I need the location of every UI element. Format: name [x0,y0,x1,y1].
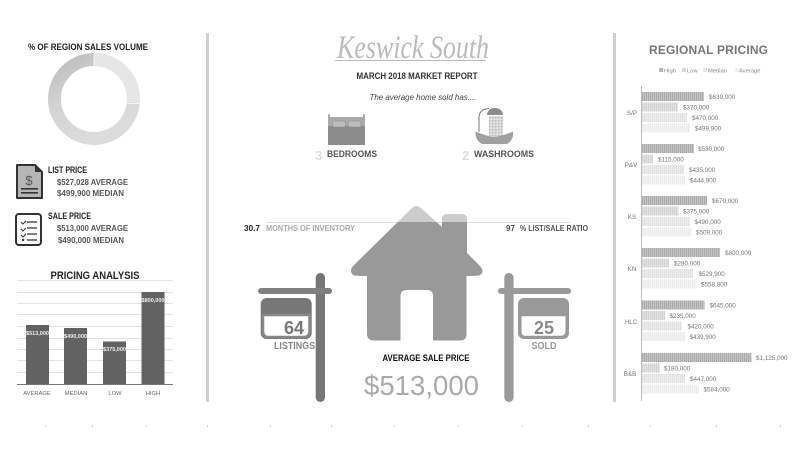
sign: listings [258,273,332,402]
group: HLC: HLC [625,319,638,326]
group: HLC [625,300,736,341]
text: washrooms [462,148,534,163]
group: B&B [624,353,788,394]
stat: list/sale ratio: 97 [506,223,515,233]
text: bedrooms: BEDROOMS [327,149,377,160]
sign: listings: LISTINGS [274,340,315,352]
bar: median: $490,000 [64,334,87,340]
group: B&B: $447,000 [690,376,717,383]
group: P&V: $115,000 [658,156,684,164]
group: P&V: $444,900 [690,178,717,184]
group: KN: $280,000 [674,260,701,268]
text: average sale price label: AVERAGE SALE PRICE [382,353,470,363]
heading: pricing analysis: PRICING ANALYSIS [50,270,140,282]
bar: low [103,342,126,384]
group: KS: KS [628,214,636,221]
text: washrooms: WASHROOMS [474,149,534,160]
donut chart: region sales volume [54,54,140,138]
text: bedrooms: 3 [315,148,322,163]
group: KN: KN [628,266,637,273]
group: KS: $490,000 [694,219,721,226]
group: HLC: $420,000 [688,324,714,330]
icon: shower and tub [475,108,513,144]
group: P&V [625,144,725,184]
group: S/P: $499,900 [695,126,722,132]
group: S/P: $370,000 [683,104,710,112]
group: KN: $529,900 [698,271,725,278]
group: B&B: $584,000 [704,386,730,394]
group: HLC: $235,000 [670,313,696,320]
bar chart: pricing analysis [17,280,173,397]
title: Keswick South: Keswick South [336,30,489,66]
axis labels: LOW [108,391,122,397]
bar: average: $513,000 [26,331,49,337]
panel: sale price [16,211,128,245]
stat: months of inventory: 30.7 [244,223,260,233]
sign: sold [498,273,571,402]
stat: months of inventory: MONTHS OF INVENTORY [266,223,355,233]
group: S/P: S/P [627,110,637,117]
group: P&V: $435,000 [689,167,716,174]
group: P&V: $530,000 [698,146,725,153]
icon: house [351,206,482,340]
group: S/P: $470,000 [692,115,719,122]
text: washrooms: 2 [462,148,469,163]
group: HLC: $439,900 [690,334,716,341]
group: S/P [627,92,736,132]
group: KS: $509,000 [696,230,723,236]
group: S/P: $639,000 [709,94,736,101]
subtitle: market report: MARCH 2018 MARKET REPORT [356,71,478,81]
group: P&V: P&V [625,162,638,169]
group: B&B: B&B [624,371,636,378]
legend: Median [708,68,727,74]
group: B&B: $1,125,000 [756,355,788,362]
text: the average home sold has: The average home sold has.... [370,93,476,102]
sign: listings: 64 [284,318,304,338]
axis labels: AVERAGE [23,391,51,397]
legend: Low [687,68,698,74]
bar: low: $375,000 [103,347,126,353]
group: KN: $800,000 [725,250,752,257]
bar: high: $800,000 [142,298,164,304]
sign: sold: 25 [534,318,554,338]
text: sale price median: $490,000 MEDIAN [58,235,124,245]
group: HLC: $645,000 [710,302,736,310]
text: sale price average: $513,000 AVERAGE [57,223,128,233]
axis labels: MEDIAN [65,391,87,397]
bar: average [26,325,49,384]
text: sale price heading: SALE PRICE [48,211,91,221]
sign: sold: SOLD [532,340,557,352]
text: bedrooms [315,148,377,163]
icon: checklist [16,214,41,245]
text: list price median: $499,900 MEDIAN [57,188,124,198]
axis labels [23,391,160,397]
icon: bed [328,114,365,145]
group: KN: $558,800 [701,282,728,288]
bar: high [142,292,164,384]
panel: list price [17,165,128,198]
text: list price average: $527,028 AVERAGE [57,177,128,187]
group: B&B: $180,000 [664,366,691,372]
legend: High [664,68,676,74]
bar: median [64,328,87,384]
group: KN [628,248,752,288]
heading: % of region sales volume: % OF REGION SALES VOLUME [28,42,148,53]
heading: regional pricing: REGIONAL PRICING [649,43,768,57]
bar chart: regional pricing [624,86,788,401]
legend [659,68,760,74]
icon: price document: $ [25,173,33,188]
text: average sale price value: $513,000 [364,370,479,401]
text: list price heading: LIST PRICE [48,165,87,175]
group: KS [628,196,739,236]
axis labels: HIGH [146,391,160,397]
legend: Average [739,68,760,74]
group: KS: $670,000 [712,198,739,205]
stat: list/sale ratio: % LIST/SALE RATIO [520,223,588,233]
group: KS: $375,000 [683,208,710,216]
